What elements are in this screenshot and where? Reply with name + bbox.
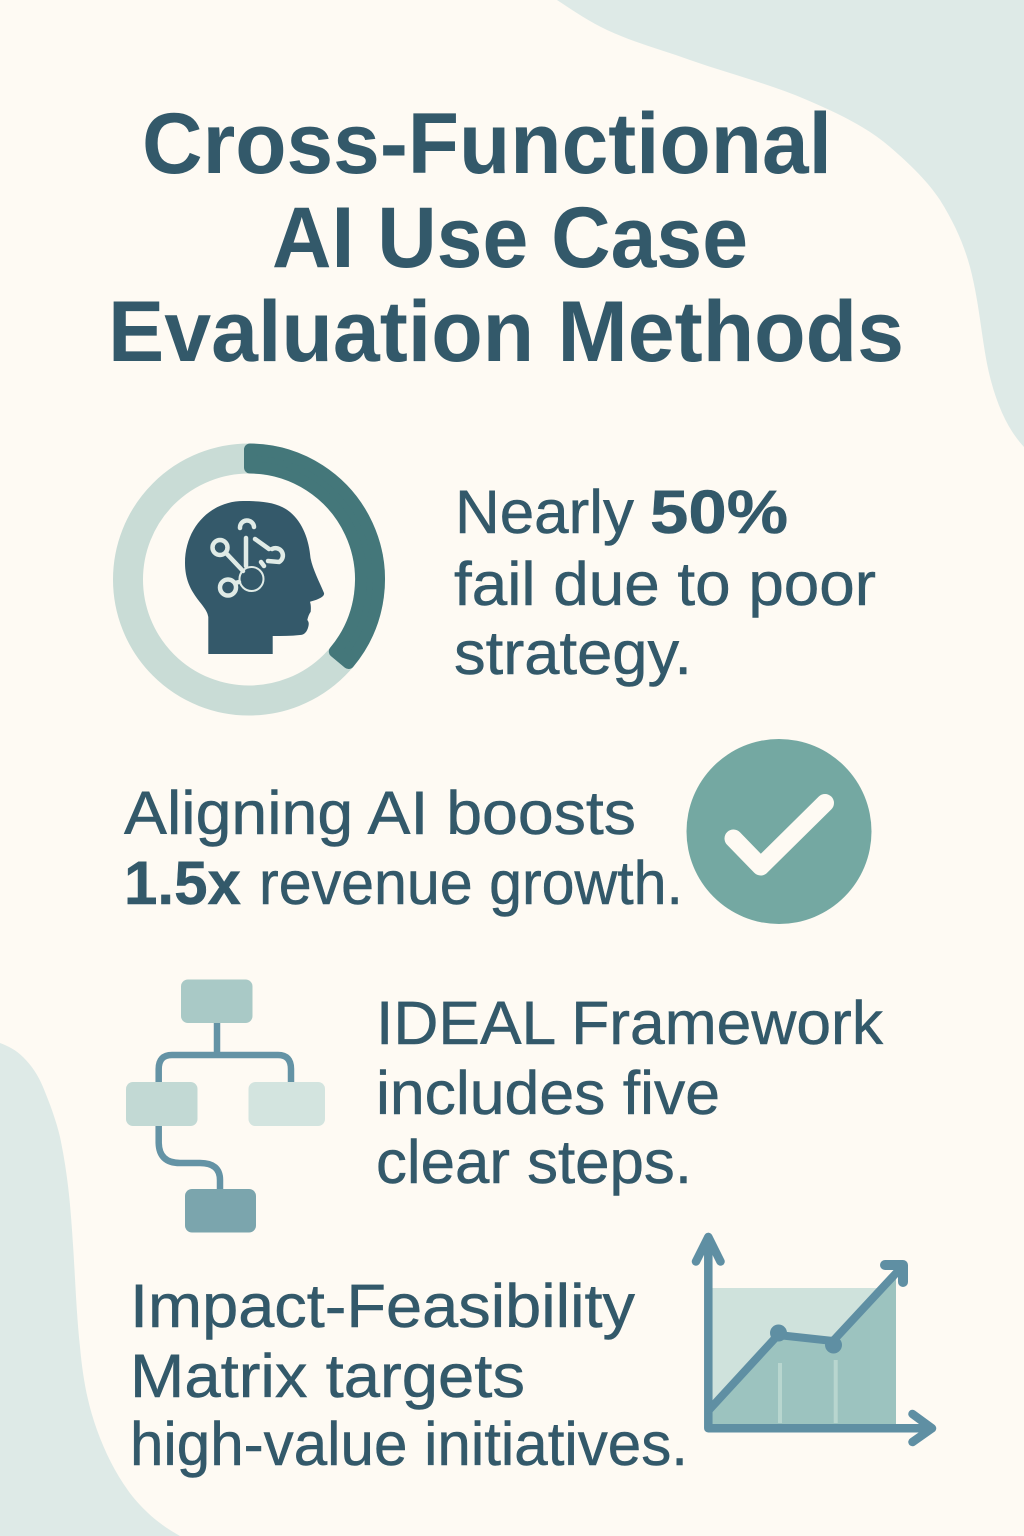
stat text: nearly 50%: 50% xyxy=(650,478,788,546)
stat text: 1.5x revenue growth: revenue growth. xyxy=(259,849,683,917)
title: Cross-Functional xyxy=(142,96,832,192)
stat text: impact-feasibility matrix: Impact-Feasibility xyxy=(130,1272,636,1340)
chart trend line xyxy=(709,1270,899,1410)
stat text: 1.5x revenue growth xyxy=(124,779,683,917)
chart backdrop xyxy=(711,1288,896,1425)
flowchart box: top xyxy=(181,980,252,1023)
stat text: IDEAL framework: IDEAL Framework xyxy=(376,989,884,1057)
stat text: impact-feasibility matrix: high-value initiatives. xyxy=(130,1410,688,1478)
chart axes xyxy=(696,1237,932,1442)
stat text: IDEAL framework: clear steps. xyxy=(376,1128,692,1196)
flowchart icon xyxy=(126,980,325,1232)
stat text: impact-feasibility matrix xyxy=(130,1272,688,1478)
flowchart box: left xyxy=(126,1082,198,1126)
chart trend arrowhead xyxy=(885,1265,903,1282)
chart area xyxy=(711,1276,896,1425)
background blob: top right xyxy=(557,0,1024,447)
chart data points xyxy=(770,1324,787,1342)
donut track xyxy=(128,458,370,700)
title: Evaluation Methods xyxy=(108,284,904,380)
icon: check mark circle xyxy=(686,739,872,924)
flowchart box: bottom xyxy=(185,1189,256,1232)
line chart icon xyxy=(696,1237,932,1442)
flowchart connectors xyxy=(159,1022,291,1190)
background blob: bottom left xyxy=(0,1043,180,1536)
icon: head with network xyxy=(185,501,324,654)
stat text: nearly 50%: Nearly xyxy=(455,478,634,546)
stat text: 1.5x revenue growth: 1.5x xyxy=(124,849,241,917)
flowchart box: right xyxy=(248,1082,325,1126)
stat text: IDEAL framework xyxy=(376,989,884,1196)
title: AI Use Case xyxy=(272,190,748,286)
stat text: nearly 50% xyxy=(454,478,876,687)
stat text: impact-feasibility matrix: Matrix targets xyxy=(130,1342,525,1410)
stat text: nearly 50%: strategy. xyxy=(454,619,692,687)
stat text: nearly 50%: fail due to poor xyxy=(454,550,876,618)
title xyxy=(108,96,904,380)
stat text: 1.5x revenue growth: Aligning AI boosts xyxy=(124,779,636,847)
donut value arc xyxy=(250,450,379,663)
donut chart with head icon xyxy=(128,450,379,700)
stat text: IDEAL framework: includes five xyxy=(376,1059,720,1127)
